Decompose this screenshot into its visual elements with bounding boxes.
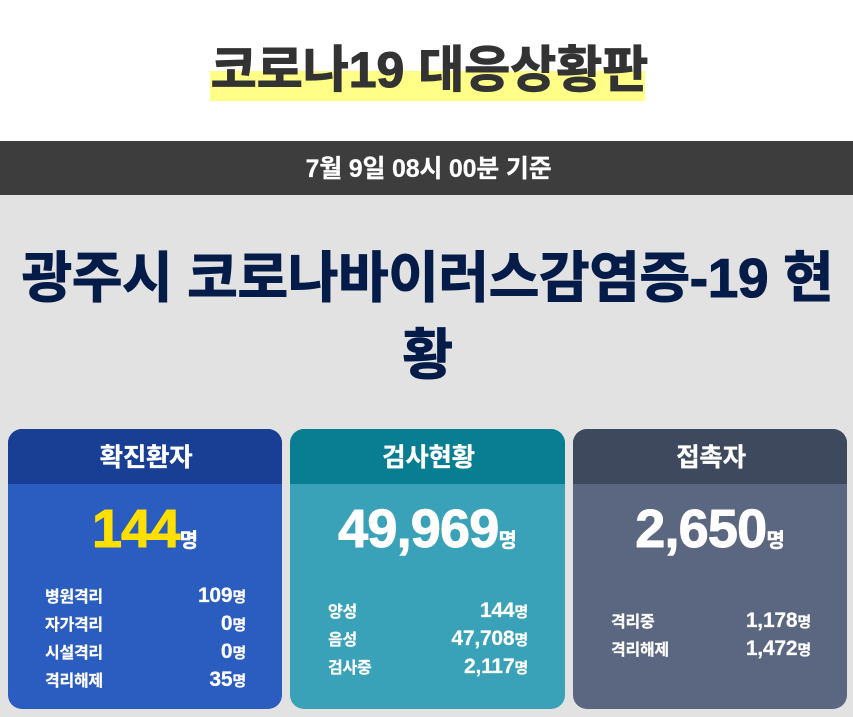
panel heading bbox=[8, 429, 282, 484]
main heading bbox=[22, 247, 833, 386]
total: 144명 bbox=[92, 499, 198, 559]
row: positive: 양성 bbox=[328, 604, 357, 621]
row: released bbox=[611, 637, 811, 660]
panel heading: 검사현황 bbox=[382, 444, 475, 472]
row: home: 0명 bbox=[221, 612, 246, 635]
total: 2,650명 bbox=[635, 499, 785, 559]
row: in quarantine bbox=[611, 609, 811, 632]
row: positive: 144명 bbox=[480, 599, 528, 622]
panel: confirmed patients bbox=[8, 429, 282, 709]
title band bbox=[0, 0, 853, 141]
panel: contacts bbox=[573, 429, 847, 709]
row: home bbox=[45, 612, 246, 635]
title highlight bbox=[210, 71, 645, 101]
row: home: 자가격리 bbox=[45, 617, 103, 634]
panel heading: 접촉자 bbox=[676, 444, 746, 472]
row: released: 격리해제 bbox=[611, 642, 669, 659]
date bar: 7월 9일 08시 00분 기준 bbox=[305, 155, 552, 183]
row: positive bbox=[328, 599, 528, 622]
row: negative: 음성 bbox=[328, 632, 357, 649]
row: testing bbox=[328, 655, 528, 678]
panel heading: 확진환자 bbox=[100, 444, 192, 472]
row: testing: 2,117명 bbox=[464, 655, 528, 678]
row: hospital: 병원격리 bbox=[45, 589, 103, 606]
row: released: 격리해제 bbox=[45, 673, 103, 690]
row: testing: 검사중 bbox=[328, 660, 371, 677]
row: in quarantine: 격리중 bbox=[611, 614, 654, 631]
row: facility: 0명 bbox=[221, 640, 246, 663]
panel heading bbox=[573, 429, 847, 484]
date bar bbox=[0, 141, 853, 195]
row: negative: 47,708명 bbox=[451, 627, 528, 650]
row: facility: 시설격리 bbox=[45, 645, 103, 662]
main heading: 광주시 코로나바이러스감염증-19 현 bbox=[22, 247, 833, 309]
row: released: 35명 bbox=[209, 668, 246, 691]
row: negative bbox=[328, 627, 528, 650]
row: released bbox=[45, 668, 246, 691]
row: in quarantine: 1,178명 bbox=[746, 609, 811, 632]
panel heading bbox=[290, 429, 565, 484]
row: facility bbox=[45, 640, 246, 663]
row: hospital bbox=[45, 584, 246, 607]
row: hospital: 109명 bbox=[198, 584, 246, 607]
panel: testing bbox=[290, 429, 565, 709]
row: released: 1,472명 bbox=[746, 637, 811, 660]
main heading: 황 bbox=[402, 324, 453, 386]
title: 코로나19 대응상황판 bbox=[211, 42, 648, 98]
total: 49,969명 bbox=[338, 499, 517, 559]
